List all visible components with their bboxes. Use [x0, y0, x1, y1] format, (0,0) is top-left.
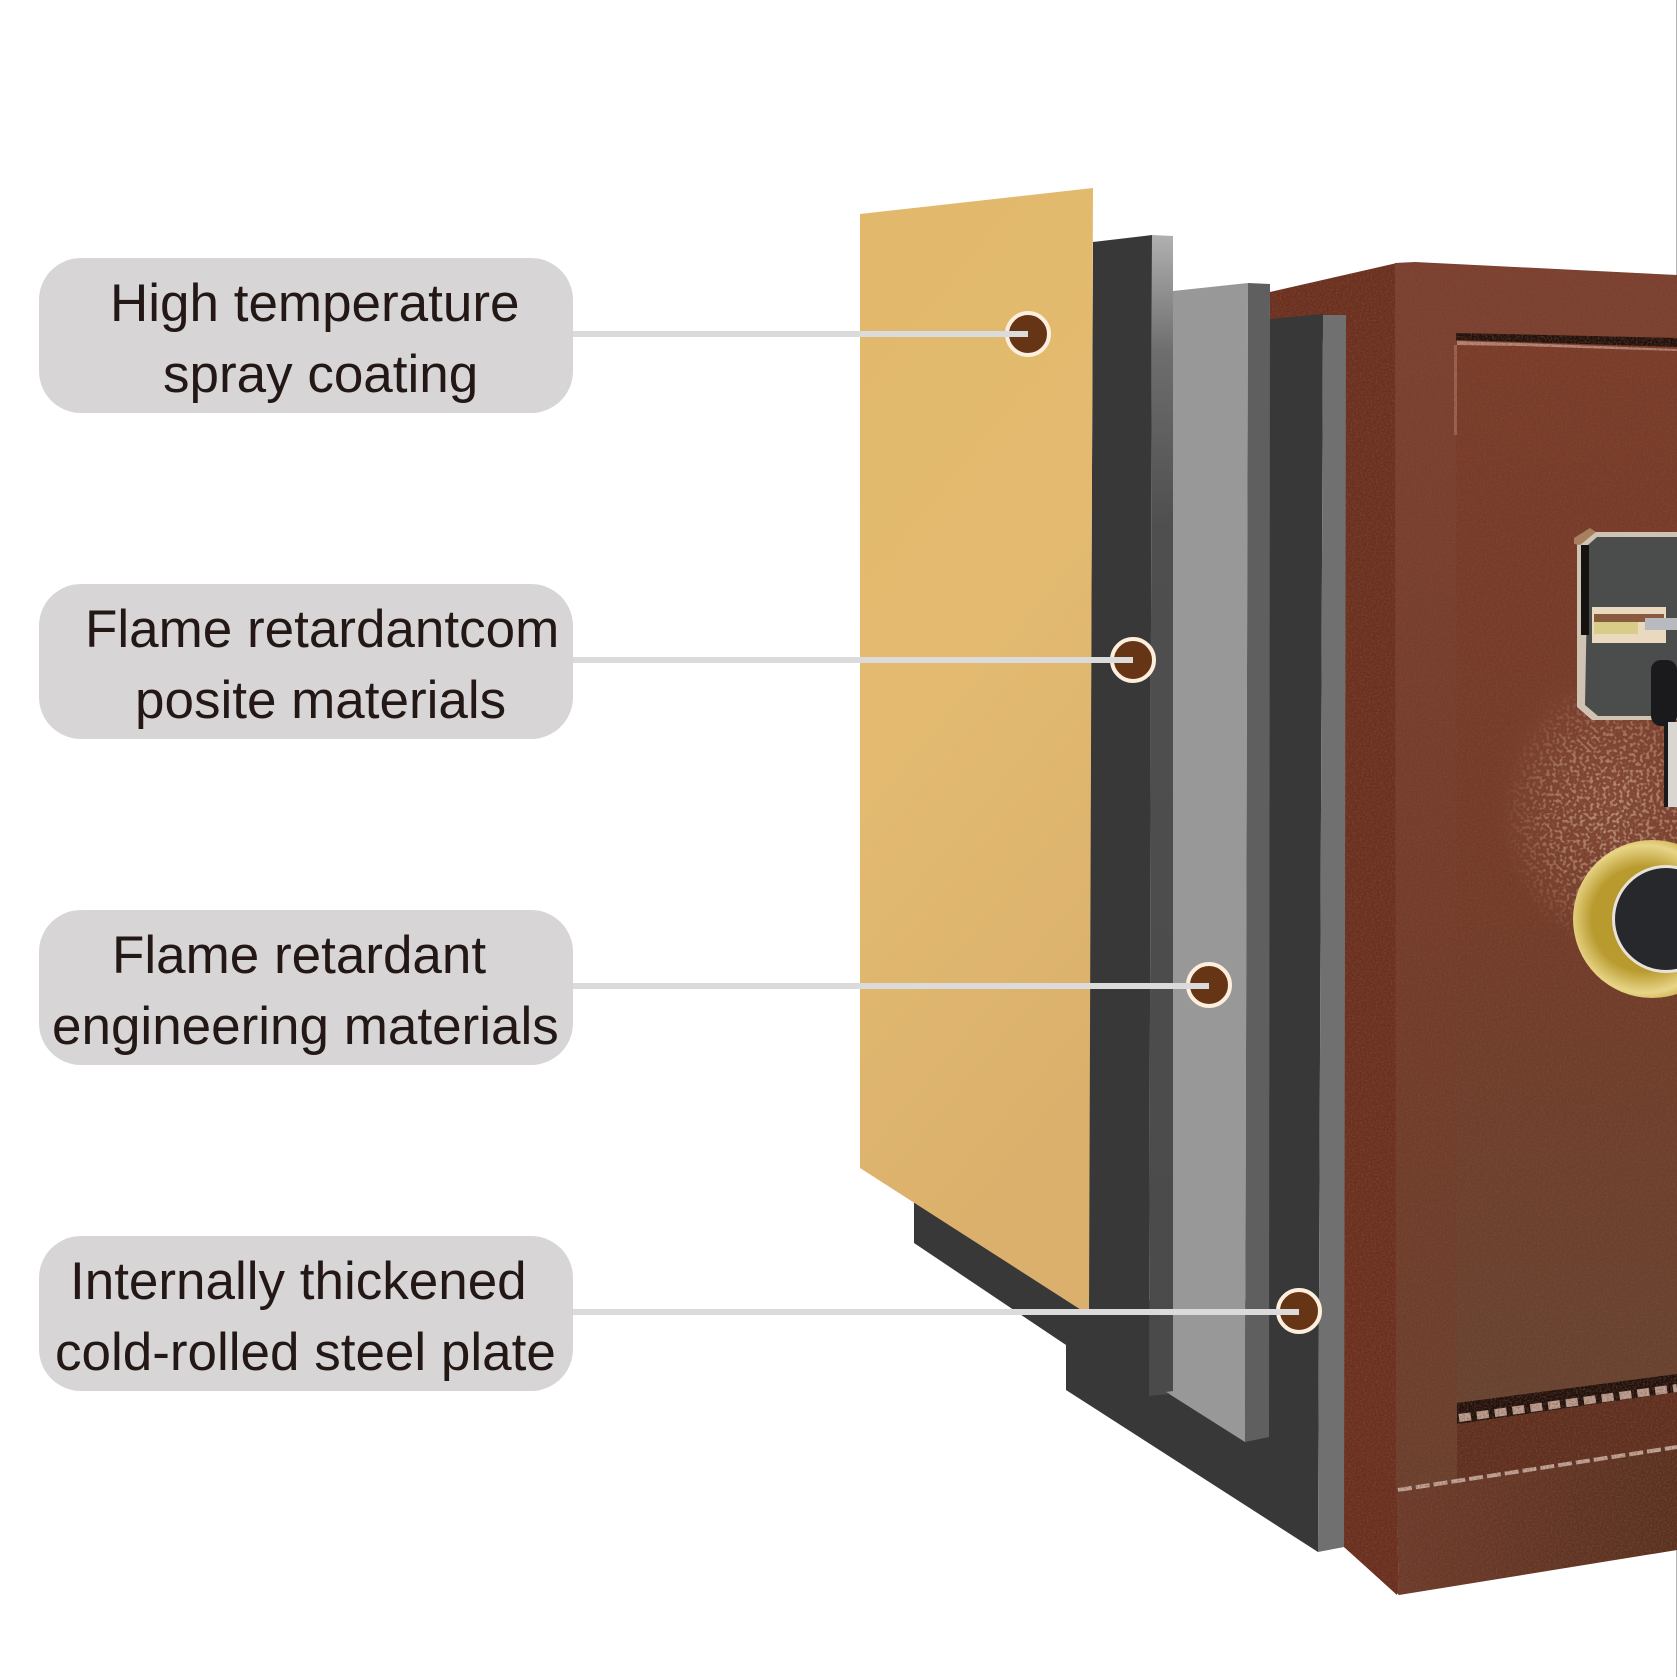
layer: high temperature spray coating	[860, 188, 1093, 1315]
layer: internally thickened cold-rolled steel plate	[1066, 314, 1346, 1552]
plate shadow edge	[1581, 545, 1589, 635]
label pill	[39, 1236, 573, 1391]
safe front frame	[1395, 262, 1677, 1490]
door top slot	[1456, 333, 1677, 347]
steel plate edge	[1318, 315, 1346, 1552]
label text: spray coating	[163, 345, 478, 404]
leader line	[573, 331, 1028, 337]
label text: Internally thickened	[70, 1252, 527, 1311]
soft sheen around lock	[1490, 655, 1677, 945]
label text	[110, 274, 519, 404]
label text	[55, 1252, 556, 1382]
door left highlight	[1454, 345, 1457, 435]
layer: flame retardant engineering materials	[1166, 283, 1270, 1442]
gold corner accent	[1574, 528, 1596, 545]
dial inner rim	[1612, 865, 1677, 973]
label text	[85, 600, 559, 730]
label text: cold-rolled steel plate	[55, 1323, 556, 1382]
leader line	[573, 1309, 1299, 1315]
marker dot	[1271, 1290, 1320, 1332]
marker dot	[1181, 964, 1230, 1006]
layer: flame retardant composite materials	[914, 235, 1173, 1400]
label text: Flame retardantcom	[85, 600, 559, 659]
leader line	[573, 983, 1209, 989]
plate frame	[1577, 532, 1677, 720]
plinth corner	[1344, 1445, 1399, 1595]
plate face	[1585, 537, 1677, 716]
right edge line	[1676, 0, 1677, 1677]
marker dot	[1105, 639, 1154, 681]
engineering edge	[1245, 283, 1270, 1442]
composite edge	[1149, 235, 1173, 1396]
callout 1	[39, 258, 1049, 413]
callout 4	[39, 1236, 1320, 1391]
label text: High temperature	[110, 274, 519, 333]
leader line	[573, 657, 1133, 663]
marker dot	[1000, 313, 1049, 355]
door panel	[1456, 340, 1677, 1412]
callout 2	[39, 584, 1154, 739]
speckled texture around lock	[1503, 675, 1677, 955]
stitch trim	[1398, 1447, 1677, 1490]
label text: Flame retardant	[112, 926, 486, 985]
metal grain	[1270, 263, 1677, 1595]
label text: posite materials	[135, 671, 506, 730]
rope trim	[1459, 1388, 1677, 1418]
rope seam	[1457, 1374, 1677, 1424]
label pill	[39, 584, 573, 739]
label text	[52, 926, 559, 1056]
lower door strip	[1457, 1381, 1677, 1487]
label pill	[39, 910, 573, 1065]
base plinth	[1396, 1447, 1677, 1595]
lock plate	[1574, 528, 1677, 807]
safe side wall	[1270, 263, 1397, 1595]
label text: engineering materials	[52, 997, 559, 1056]
steel plate face	[1066, 314, 1323, 1552]
dial face	[1615, 868, 1677, 970]
label pill	[39, 258, 573, 413]
gold ring	[1573, 840, 1677, 998]
composite face	[914, 235, 1152, 1400]
latch	[1592, 607, 1677, 643]
dial lock	[1573, 840, 1677, 998]
key	[1651, 660, 1677, 807]
safe body	[1270, 262, 1677, 1595]
engineering face	[1166, 283, 1248, 1442]
callout 3	[39, 910, 1230, 1065]
door top highlight	[1457, 341, 1677, 351]
